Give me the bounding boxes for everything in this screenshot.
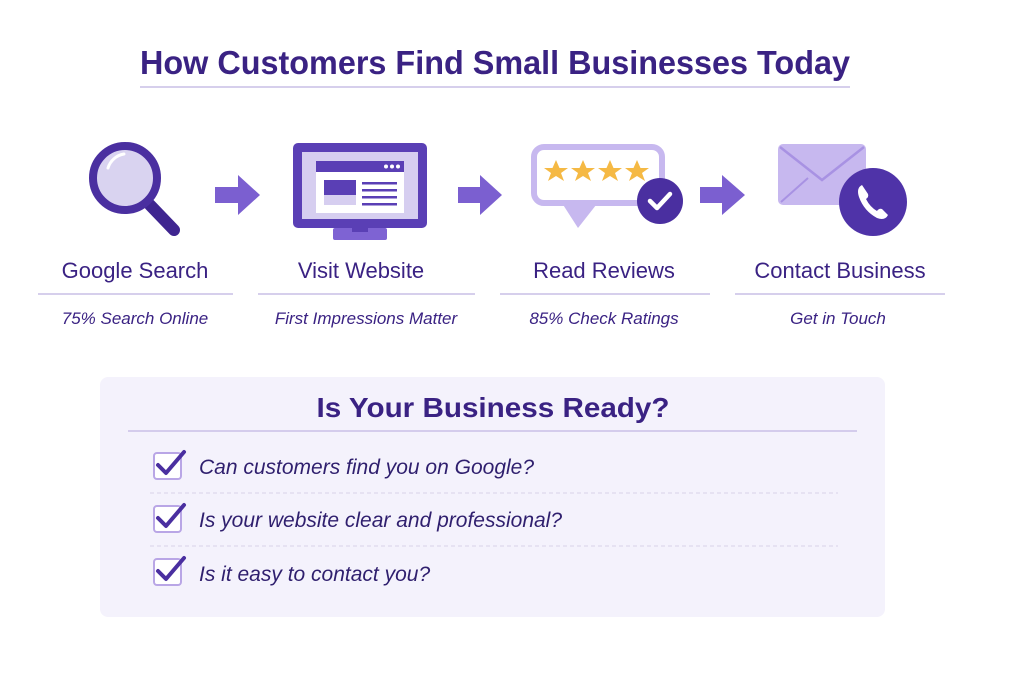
step 4 label: Contact Business [754, 258, 926, 283]
panel heading: Is Your Business Ready? [316, 392, 670, 423]
step 3 label: 85% Check Ratings [529, 309, 679, 328]
icon: review bubble [534, 147, 683, 228]
step 4 label: Get in Touch [790, 309, 886, 328]
arrow 3 [700, 175, 745, 215]
checklist item 2: Is your website clear and professional? [199, 509, 562, 532]
title: How Customers Find Small Businesses Today [140, 44, 851, 81]
checklist item 1: Can customers find you on Google? [199, 456, 534, 479]
step 2 label: First Impressions Matter [275, 309, 458, 328]
step 1 label [38, 258, 233, 328]
panel: checklist [100, 377, 885, 617]
arrow 1 [215, 175, 260, 215]
icon: magnifying glass [93, 146, 174, 230]
step 3 label: Read Reviews [533, 258, 675, 283]
arrow 2 [458, 175, 502, 215]
step 2 label [258, 258, 475, 328]
step 1 label: Google Search [62, 258, 208, 283]
checklist item 3 [154, 558, 430, 586]
step 4 label [735, 258, 945, 328]
icon: envelope and phone [778, 144, 907, 236]
step 2 label: Visit Website [298, 258, 424, 283]
step 3 label [500, 258, 710, 328]
step 1 label: 75% Search Online [62, 309, 208, 328]
checklist item 3: Is it easy to contact you? [199, 563, 430, 586]
icon: monitor [293, 143, 427, 240]
